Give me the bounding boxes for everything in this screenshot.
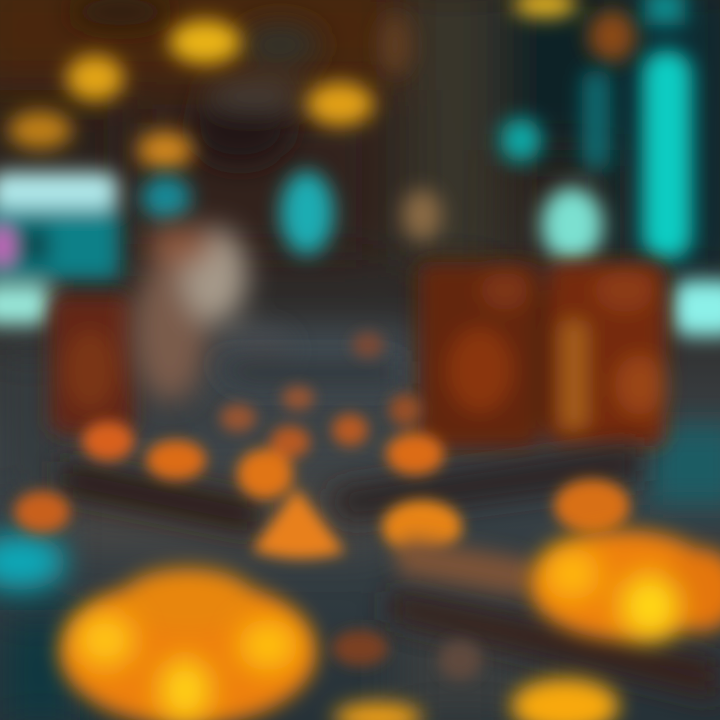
right neon sign [672,280,720,336]
seated figure [132,225,290,402]
left neon sign [0,172,120,325]
small orange glowing pieces [14,332,630,680]
cyan lights [141,0,692,263]
brown crate left [50,295,134,435]
tan plank [393,536,537,598]
dark wall mottling [70,0,320,165]
table edges [60,360,720,700]
hanging yellow lamps [8,0,636,241]
teal glow right [650,425,720,505]
brown crates right [418,262,666,450]
teal glow bottom left [0,534,66,590]
large glowing orange cluster right [530,530,720,640]
bottom glowing pieces [334,678,619,720]
cluster highlights left [75,612,298,720]
large glowing orange cluster left [60,568,316,720]
cluster highlights right [544,548,680,638]
